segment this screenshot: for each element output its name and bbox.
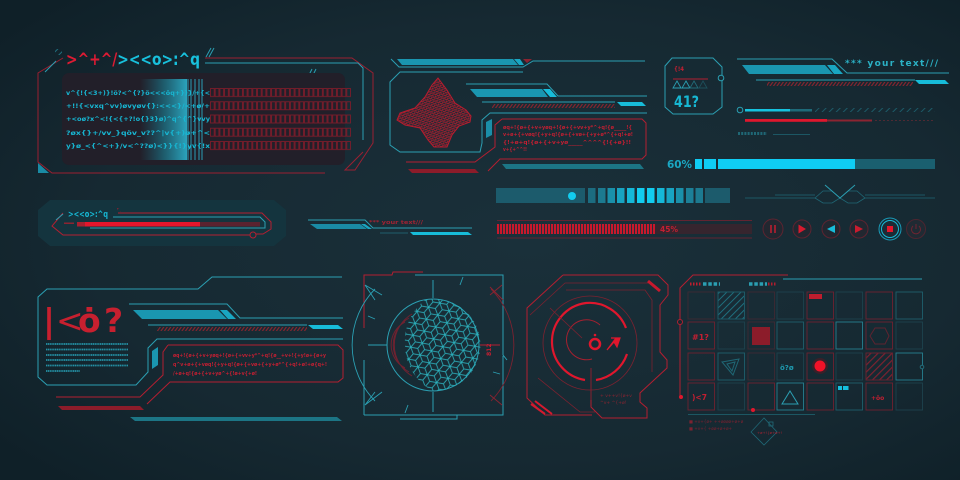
outer arcs <box>352 277 514 413</box>
value: 41? <box>674 92 699 111</box>
hexagon icon <box>870 328 889 344</box>
button: stop <box>879 218 901 240</box>
square frame <box>364 272 507 419</box>
wireframe mountain <box>397 78 471 147</box>
decoded text rows: v^{!{<3+)}!ö?<^{?}ö<<<öq+})}/+{< <box>66 89 210 97</box>
cell label: +öo <box>871 395 884 402</box>
circuit lines <box>52 208 271 238</box>
hatched cell red <box>866 354 892 380</box>
hexagon frame <box>665 58 722 114</box>
dark data area <box>62 73 345 165</box>
button: power <box>906 220 926 238</box>
cell label: )<7 <box>692 393 707 402</box>
label: decoding: ><<o>:^q <box>68 210 108 220</box>
paragraph <box>503 125 633 153</box>
frame lines <box>38 277 343 404</box>
tessellated sphere <box>404 299 480 391</box>
decoded text rows: +!!{<vxq^vv)øvyøv{}:<<<}/<+ø/+ <box>66 102 210 110</box>
chart: line meters <box>737 107 935 134</box>
rails <box>497 220 752 238</box>
HUD infographic canvas <box>38 48 949 446</box>
title: data decoding: >^+^/><<o>:^q <box>66 50 200 70</box>
panel background <box>38 200 286 246</box>
header bars <box>742 65 949 86</box>
percent label: 60% <box>667 159 692 171</box>
guide lines <box>550 308 591 400</box>
panel: icon grid <box>678 275 924 445</box>
scan gradient <box>140 79 187 160</box>
paragraph: øq+!{ø+{+v+yøq+!{ø+{+vv+y*^+q!{ø_____!{ <box>503 125 632 131</box>
panel: small decoding bar <box>38 200 286 246</box>
caption: ^v+ ^{+ø! <box>600 400 627 406</box>
cell label: #1? <box>692 333 709 342</box>
panel: radar dial <box>527 275 668 418</box>
heading: your text: *** your text/// <box>845 59 939 69</box>
decoded text rows: y}ø_<{^<+}/v<^??ø)<}}{!}yv{!x <box>66 142 211 150</box>
top indicator cells <box>690 282 777 286</box>
bottom legend: ■ +v+{ø+ ++øøøø+ø+ø <box>689 419 744 424</box>
panel: your text strip <box>308 220 472 235</box>
right knob <box>920 365 924 369</box>
outer sphere ring <box>387 299 479 391</box>
frame lines <box>390 59 647 171</box>
button: rewind <box>822 220 840 238</box>
connector knob <box>718 75 724 81</box>
decoded text rows <box>66 89 211 150</box>
decoded text rows: +<oø?x^<!{<{+?!o{}3}ø)^q^{^}vvy <box>66 115 211 123</box>
percent label: 45% <box>660 225 678 234</box>
diamond callout <box>751 418 782 445</box>
corner stripes <box>531 281 660 414</box>
strip bars <box>310 224 472 235</box>
caption <box>600 393 632 406</box>
progress bar: 45% red <box>497 220 752 238</box>
cyan meter <box>737 107 935 113</box>
paragraph: øq+!{ø+{+v+yøq+!{ø+{+vv+y*^+q!{ø__+v+!{+y!ø+{ø+y <box>173 353 327 359</box>
progress bar: 60% <box>667 159 935 171</box>
outer ring <box>543 296 637 390</box>
media controls <box>763 218 926 240</box>
outer frame <box>527 275 668 418</box>
end block <box>705 188 730 203</box>
button: pause <box>763 219 783 239</box>
grid frame <box>678 275 922 399</box>
red inner arcs <box>391 314 412 376</box>
decorative chevron ornament <box>745 185 935 203</box>
bright arc segments <box>552 303 627 380</box>
small label: {!4 <box>674 66 684 73</box>
paragraph: /+ø+q!{ø+{+v+yø^+{!ø+v{+ø! <box>173 371 257 377</box>
pyramid icon <box>722 359 739 375</box>
big value: | <box>43 301 55 340</box>
centre marker <box>590 334 600 349</box>
paragraph: v+ø+{+vøq!{+y+q!{ø+{+vø+{+y+ø*^{+q!+ø! <box>503 132 633 138</box>
solid red square <box>752 327 770 345</box>
button: play <box>793 220 811 238</box>
panel: status hexagon <box>665 58 724 114</box>
small red marker <box>809 294 822 299</box>
paragraph: q^v+ø+{+vøq!{+y+q!{ø+{+vø+{+y+ø*^{+q!+ø!+ø{q+! <box>173 362 327 368</box>
label: *** your text/// <box>369 220 424 226</box>
remaining track <box>655 224 752 234</box>
red meter <box>745 119 935 122</box>
panel: your text header <box>737 59 949 86</box>
inner arc <box>567 320 600 360</box>
panel: data decoding <box>38 48 373 173</box>
arrow <box>607 338 620 350</box>
grid cells <box>688 292 922 410</box>
axis label: 812 <box>486 343 493 356</box>
big value: < <box>56 301 84 340</box>
separator <box>673 78 708 80</box>
progress bar <box>64 222 260 226</box>
big value: ȯ <box>78 301 101 340</box>
paragraph <box>173 353 327 377</box>
progress bar: slider with segments <box>496 188 730 203</box>
cross hairs <box>368 280 500 412</box>
header lines <box>737 59 949 80</box>
panel frame <box>38 48 373 173</box>
striped fill <box>497 224 655 234</box>
red cell block <box>210 88 351 154</box>
scan stripes <box>188 79 202 160</box>
bottom rule and dot <box>688 408 815 414</box>
strip lines <box>308 220 472 228</box>
button: forward <box>850 220 868 238</box>
teal text lines <box>46 344 128 371</box>
cell label: ö?ø <box>780 364 794 372</box>
panel: sphere scanner <box>352 272 514 419</box>
dim meter <box>738 134 810 135</box>
segments <box>588 188 703 203</box>
paragraph: v+{+^^!! <box>503 147 527 153</box>
decoded text rows: ?øx{}+/vv_}qöv_v??^|v{+)ø+^< <box>66 129 210 138</box>
cyan chips <box>838 386 848 390</box>
caption: + v++v!{ø+v <box>600 393 632 399</box>
record dot <box>812 358 828 374</box>
bars <box>397 59 646 173</box>
hatched cell teal <box>718 292 744 318</box>
panel: 1402 data card <box>38 277 343 421</box>
panel: wireframe terrain <box>390 59 647 173</box>
bottom legend: ■ +v+{ +øø+ø+ø+ <box>689 426 733 431</box>
bottom legend <box>689 419 744 431</box>
big value: ? <box>104 301 123 340</box>
slider track <box>496 188 585 203</box>
bars <box>58 310 343 421</box>
filled segments <box>695 159 855 169</box>
diamond callout: +ø+!{ø+ø+! <box>757 430 782 435</box>
triangles <box>673 81 707 88</box>
remaining track <box>855 159 935 169</box>
triangle icon <box>782 391 798 404</box>
slider knob <box>568 192 576 200</box>
paragraph: {!+ø+q!{ø+{+v+yø_____^^^^{!{+ø}!! <box>503 140 631 146</box>
